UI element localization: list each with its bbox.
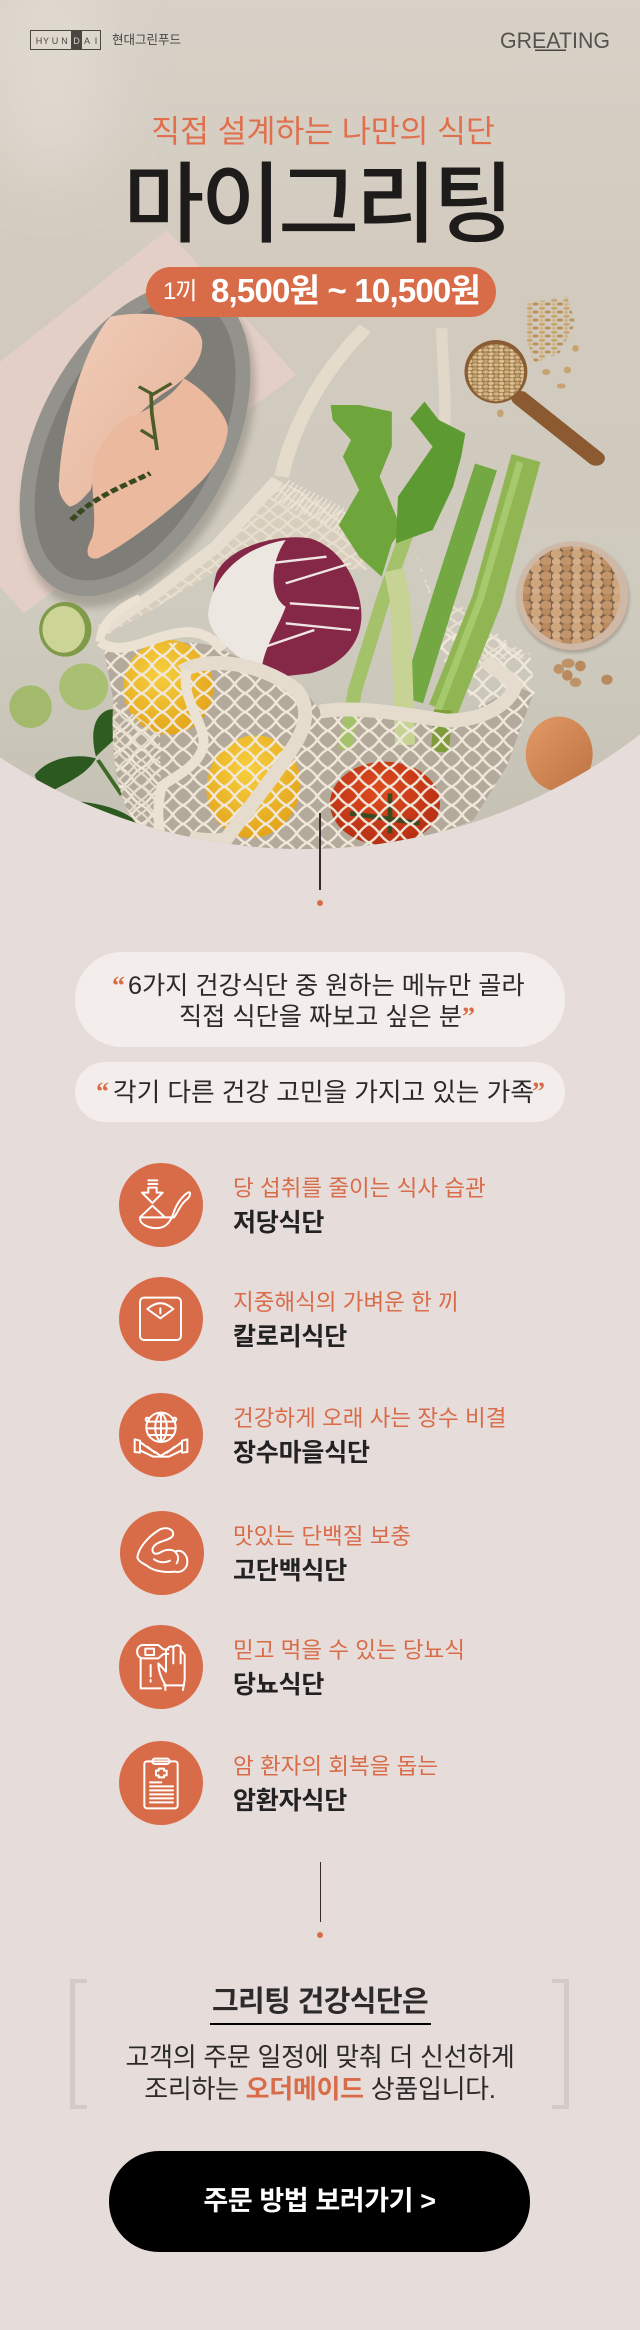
brussels sprouts, basil, egg — [9, 602, 613, 837]
description text — [126, 2042, 514, 2104]
plate — [19, 293, 259, 611]
icon: glucose meter and hand — [119, 1625, 203, 1709]
icon: flexed arm — [120, 1511, 204, 1595]
hero photo: food arrangement in a circular crop — [0, 0, 640, 849]
logo: Greating: GREATING — [500, 28, 610, 53]
mesh bag, back part with upper strap region — [98, 328, 535, 853]
menu item: cancer patient — [119, 1741, 438, 1825]
description text: 고객의 주문 일정에 맞춰 더 신선하게 — [126, 2042, 514, 2072]
description text: 조리하는 오더메이드 상품입니다. — [144, 2074, 496, 2104]
button: how to order — [109, 2151, 530, 2252]
chickpea bowl — [517, 541, 630, 653]
menu item: high protein — [120, 1511, 411, 1595]
menu item: cancer patient: 암환자식단 — [233, 1787, 347, 1815]
chicken breasts — [59, 314, 228, 559]
logo: Hyundai Green Food — [30, 30, 181, 50]
heading underline — [210, 2023, 431, 2025]
price pill: 1끼 — [163, 278, 196, 305]
price pill: 8,500원 ~ 10,500원 — [211, 272, 480, 309]
quote bubble 2: 각기 다른 건강 고민을 가지고 있는 가족 — [113, 1079, 534, 1107]
subtitle: 직접 설계하는 나만의 식단 — [151, 113, 495, 149]
logo: Hyundai Green Food: 현대그린푸드 — [112, 33, 181, 47]
menu item: diabetic — [119, 1625, 465, 1709]
quote bubble 2: “ — [96, 1077, 109, 1106]
quote bubble 2 — [75, 1062, 565, 1122]
menu item: calorie: 칼로리식단 — [233, 1323, 347, 1351]
menu item: calorie: 지중해식의 가벼운 한 끼 — [233, 1290, 459, 1315]
menu item: high protein: 맛있는 단백질 보충 — [233, 1524, 411, 1549]
menu item: diabetic: 당뇨식단 — [233, 1671, 324, 1699]
logo: Hyundai Green Food: HYUN — [36, 36, 68, 46]
icon: medical clipboard — [119, 1741, 203, 1825]
main title: 마이그리팅 — [123, 155, 511, 254]
left bracket — [70, 1979, 87, 2109]
stone background — [0, 0, 640, 860]
connector line with dot — [317, 1862, 323, 1938]
logo: Hyundai Green Food: D — [73, 36, 80, 46]
menu item: longevity — [119, 1393, 506, 1477]
icon: spoon with sugar — [119, 1163, 203, 1247]
mesh bag, front net and straps — [100, 598, 533, 853]
quote bubble 1: 직접 식단을 짜보고 싶은 분 — [179, 1003, 462, 1031]
wooden spoon with rice — [464, 297, 596, 458]
icon: weighing scale — [119, 1277, 203, 1361]
quote bubble 2: ” — [532, 1077, 545, 1106]
quote bubble 1: “ — [112, 971, 125, 1000]
right bracket — [552, 1979, 569, 2109]
radicchio — [208, 537, 361, 678]
quote bubble 1: 6가지 건강식단 중 원하는 메뉴만 골라 — [128, 972, 525, 1000]
napkin — [0, 230, 296, 613]
celery stalks and leaves — [331, 402, 526, 752]
quote bubble 1 — [75, 952, 565, 1047]
menu item: cancer patient: 암 환자의 회복을 돕는 — [233, 1754, 438, 1779]
menu item: longevity: 장수마을식단 — [233, 1439, 370, 1467]
button: how to order: 주문 방법 보러가기 > — [203, 2186, 436, 2216]
section heading: 그리팅 건강식단은 — [212, 1986, 428, 2018]
menu item: longevity: 건강하게 오래 사는 장수 비결 — [233, 1406, 506, 1431]
menu item: high protein: 고단백식단 — [233, 1557, 347, 1585]
menu item: calorie — [119, 1277, 459, 1361]
logo: Hyundai Green Food: AI — [84, 36, 97, 46]
lemons and tomato inside the bag — [123, 640, 440, 849]
menu item: diabetic: 믿고 먹을 수 있는 당뇨식 — [233, 1638, 465, 1663]
price pill — [146, 267, 496, 317]
connector line with dot — [317, 813, 323, 906]
icon: globe in hands — [119, 1393, 203, 1477]
quote bubble 1: ” — [462, 1002, 475, 1031]
menu item: low sugar: 당 섭취를 줄이는 식사 습관 — [233, 1176, 486, 1201]
menu item: low sugar: 저당식단 — [233, 1209, 324, 1237]
menu item: low sugar — [119, 1163, 486, 1247]
